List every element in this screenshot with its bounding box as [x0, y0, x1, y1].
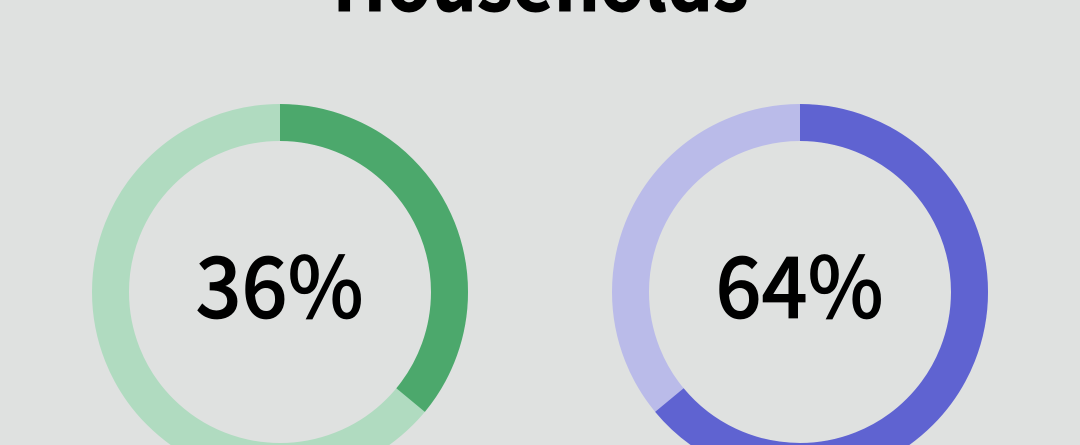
donut chart: 64%: 64%: [716, 220, 884, 343]
donut chart: 64%: [630, 122, 970, 445]
donut chart: 36%: [110, 122, 450, 445]
donut chart: 36%: 36%: [196, 220, 364, 343]
